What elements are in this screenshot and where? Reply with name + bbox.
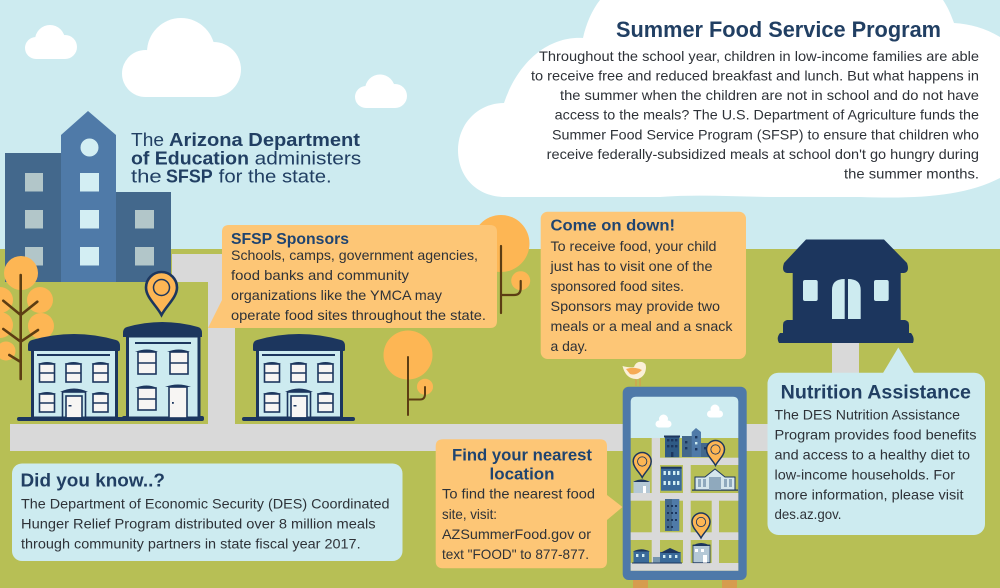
callout: Nutrition Assistance: Program provides food benefits xyxy=(774,427,977,442)
heading: Arizona Department of Education: SFSP xyxy=(166,166,213,187)
heading: Arizona Department of Education: The xyxy=(131,129,164,150)
tablet map xyxy=(623,387,747,588)
callout: SFSP Sponsors: Schools, camps, government agencies, xyxy=(231,248,478,263)
callout: SFSP Sponsors: organizations like the YMCA may xyxy=(231,288,442,303)
callout: Come on down xyxy=(541,212,746,359)
building: left house xyxy=(17,334,130,421)
sky background xyxy=(0,0,1000,249)
building: centre house xyxy=(242,334,355,421)
heading: Arizona Department of Education: the xyxy=(131,166,162,187)
callout: Come on down: Come on down! xyxy=(550,218,675,235)
callout: Nutrition Assistance: Nutrition Assistance xyxy=(781,382,971,403)
heading: Arizona Department of Education: administers xyxy=(255,147,361,168)
intro text block: Throughout the school year, children in low-income families are able xyxy=(539,49,979,64)
mini buildings xyxy=(632,428,738,564)
callout: Nutrition Assistance: and access to a healthy diet to xyxy=(774,447,970,462)
callout: Find your nearest location: site, visit: xyxy=(442,507,497,522)
callout: Did you know xyxy=(12,464,402,561)
tablet screen xyxy=(631,397,738,571)
intro text block: to receive free and reduced breakfast and lunch. But what happens in xyxy=(531,68,979,84)
callout: Find your nearest location: location xyxy=(490,465,554,483)
callout: Find your nearest location: AZSummerFood.gov or xyxy=(442,527,591,542)
callout: Nutrition Assistance xyxy=(768,348,985,535)
callout: SFSP Sponsors: SFSP Sponsors xyxy=(231,231,349,248)
callout: Come on down: just has to visit one of the xyxy=(549,259,713,274)
building: sponsored site with pin xyxy=(122,322,204,421)
callout: Did you know: through community partners in state fiscal year 2017. xyxy=(21,537,361,552)
callout: Come on down: a day. xyxy=(550,339,588,354)
callout: Did you know: Hunger Relief Program distributed over 8 million meals xyxy=(21,517,376,532)
grass ground xyxy=(0,249,1000,588)
intro text block: Summer Food Service Program (SFSP) to ensure that children who xyxy=(552,127,979,142)
callout: Find your nearest location: To find the nearest food xyxy=(442,486,595,501)
heading: Summer Food Service Program: Summer Food Service Program xyxy=(616,17,941,42)
intro text block xyxy=(531,49,979,182)
intro text block: access to the meals? The U.S. Department of Agriculture funds the xyxy=(555,108,979,123)
intro text block: the summer when the children are not in school and do not have xyxy=(560,88,979,103)
callout: Nutrition Assistance: more information, please visit xyxy=(774,487,964,502)
callout: Come on down: Sponsors may provide two xyxy=(550,299,720,314)
large cloud behind intro text xyxy=(458,0,1000,198)
callout: Nutrition Assistance: low-income households. For xyxy=(774,467,955,482)
callout: Find your nearest location xyxy=(436,439,622,568)
cloud: large centre xyxy=(122,18,241,97)
callout: Did you know: The Department of Economic Security (DES) Coordinated xyxy=(21,496,390,511)
tree: behind sponsors callout xyxy=(472,215,530,313)
callout: SFSP Sponsors: operate food sites throughout the state. xyxy=(231,308,486,323)
callout: Come on down: sponsored food sites. xyxy=(550,279,684,294)
icon: location pin over house xyxy=(146,272,177,315)
intro text block: receive federally-subsidized meals at school don't go hungry during xyxy=(547,147,979,162)
tree: left autumn tree xyxy=(0,256,54,379)
cloud: small left xyxy=(25,25,77,59)
heading: Arizona Department of Education: Arizona Department xyxy=(169,129,360,150)
icon: bird xyxy=(622,362,646,386)
map pins xyxy=(633,441,724,538)
callout: SFSP Sponsors: food banks and community xyxy=(231,268,409,283)
callout: Nutrition Assistance: The DES Nutrition Assistance xyxy=(774,407,960,422)
callout: SFSP Sponsors xyxy=(208,225,497,328)
callout: Did you know: Did you know..? xyxy=(20,471,165,491)
icon: Department of Education building xyxy=(5,111,171,284)
icon: Nutrition Assistance office xyxy=(778,240,914,343)
callout: Nutrition Assistance: des.az.gov. xyxy=(774,507,842,522)
callout: Find your nearest location: text "FOOD" to 877-877. xyxy=(442,547,589,562)
callout: Come on down: meals or a meal and a snack xyxy=(550,319,733,334)
callout: Come on down: To receive food, your child xyxy=(550,239,716,254)
grass block in front of school xyxy=(0,282,208,424)
heading: Arizona Department of Education: of Education xyxy=(131,147,249,168)
road network xyxy=(10,254,859,451)
cloud: small right xyxy=(355,74,407,108)
heading: Arizona Department of Education: for the state. xyxy=(219,166,332,187)
callout: Find your nearest location: Find your nearest xyxy=(452,447,593,465)
tree: centre xyxy=(384,330,433,415)
intro text block: the summer months. xyxy=(844,166,979,182)
heading: Arizona Department of Education xyxy=(131,129,361,187)
